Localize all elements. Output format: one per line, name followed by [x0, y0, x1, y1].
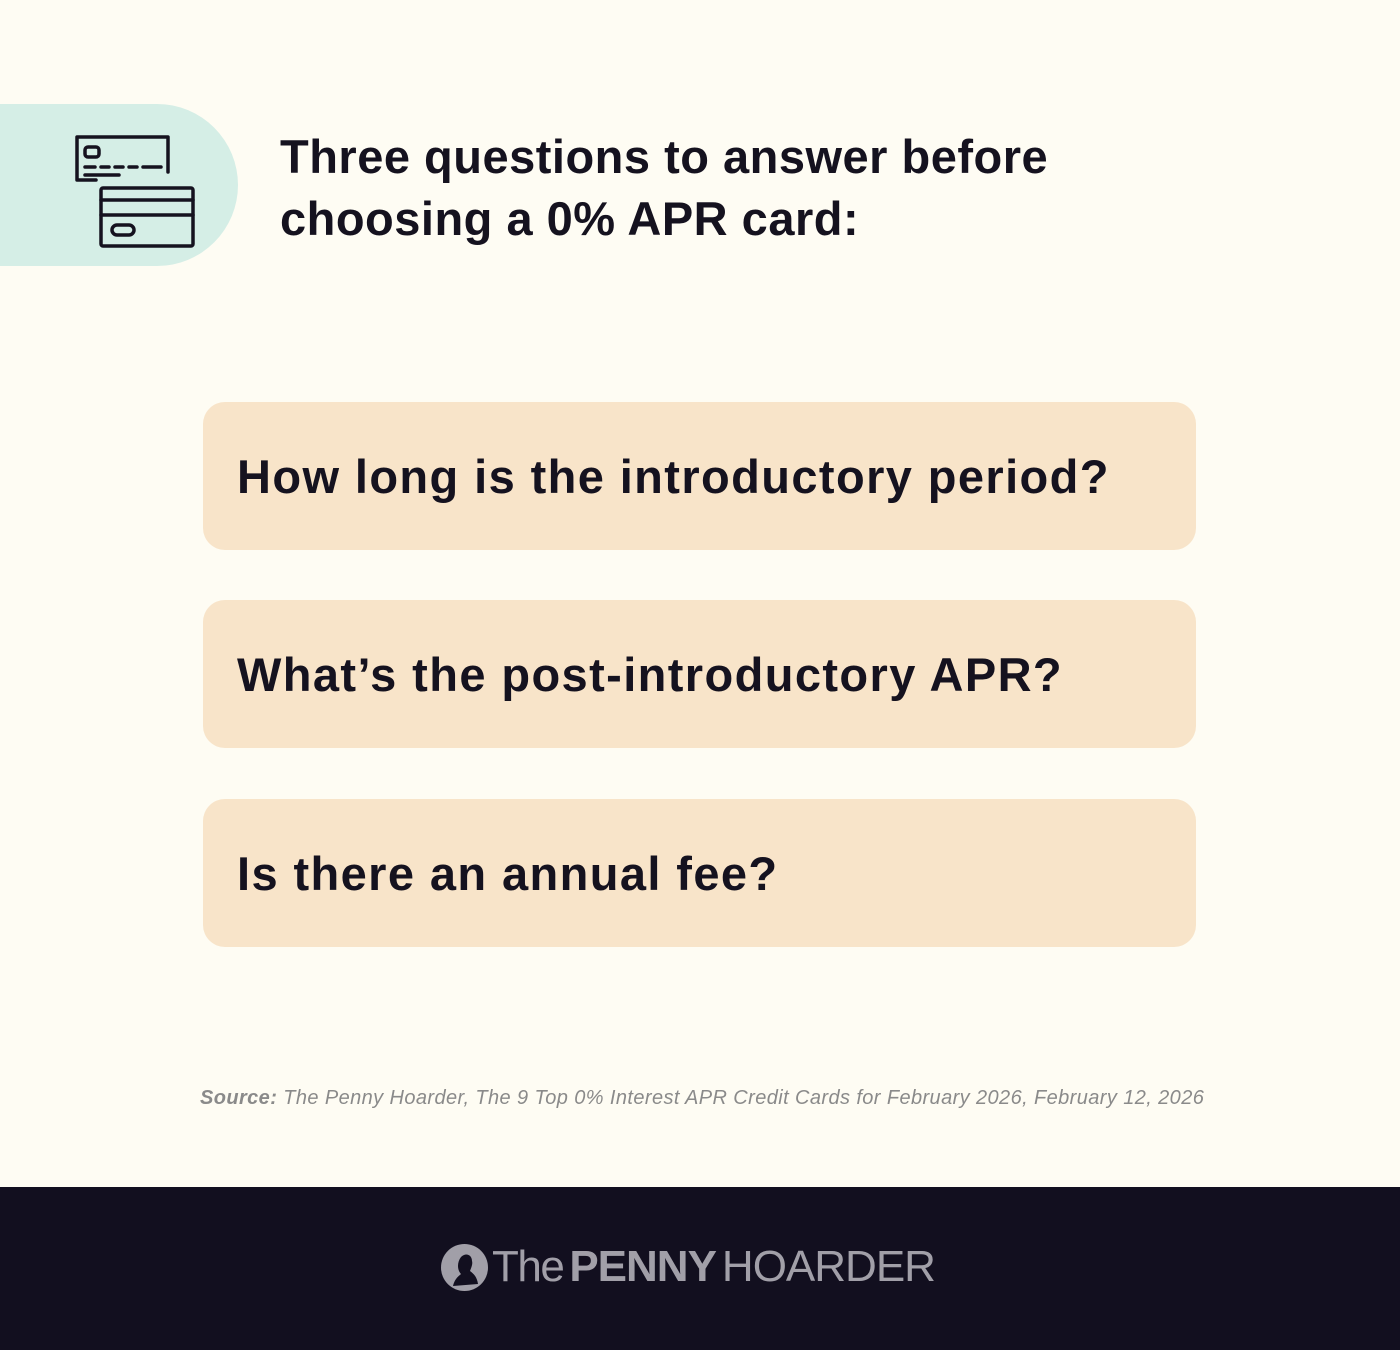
icon: credit cards: [75, 135, 195, 248]
source: Source: The Penny Hoarder, The 9 Top 0% Interest APR Credit Cards for February 2026, February 12, 2026: [200, 1087, 1204, 1109]
tab: icon background: [0, 104, 238, 266]
question 2: What’s the post-introductory APR?: [237, 648, 1063, 701]
title: choosing a 0% APR card:: [280, 192, 859, 245]
logo: HOARDER: [722, 1242, 935, 1291]
question 3: [203, 799, 1196, 947]
logo: PENNY: [569, 1242, 716, 1291]
title: [280, 130, 1048, 245]
title: Three questions to answer before: [280, 130, 1048, 183]
logo: The: [492, 1242, 563, 1291]
question 3: Is there an annual fee?: [237, 847, 779, 900]
question 1: [203, 402, 1196, 550]
footer: [0, 1187, 1400, 1350]
logo: [441, 1242, 935, 1291]
question 1: How long is the introductory period?: [237, 450, 1110, 503]
question 2: [203, 600, 1196, 748]
icon: penny portrait: [441, 1244, 488, 1291]
